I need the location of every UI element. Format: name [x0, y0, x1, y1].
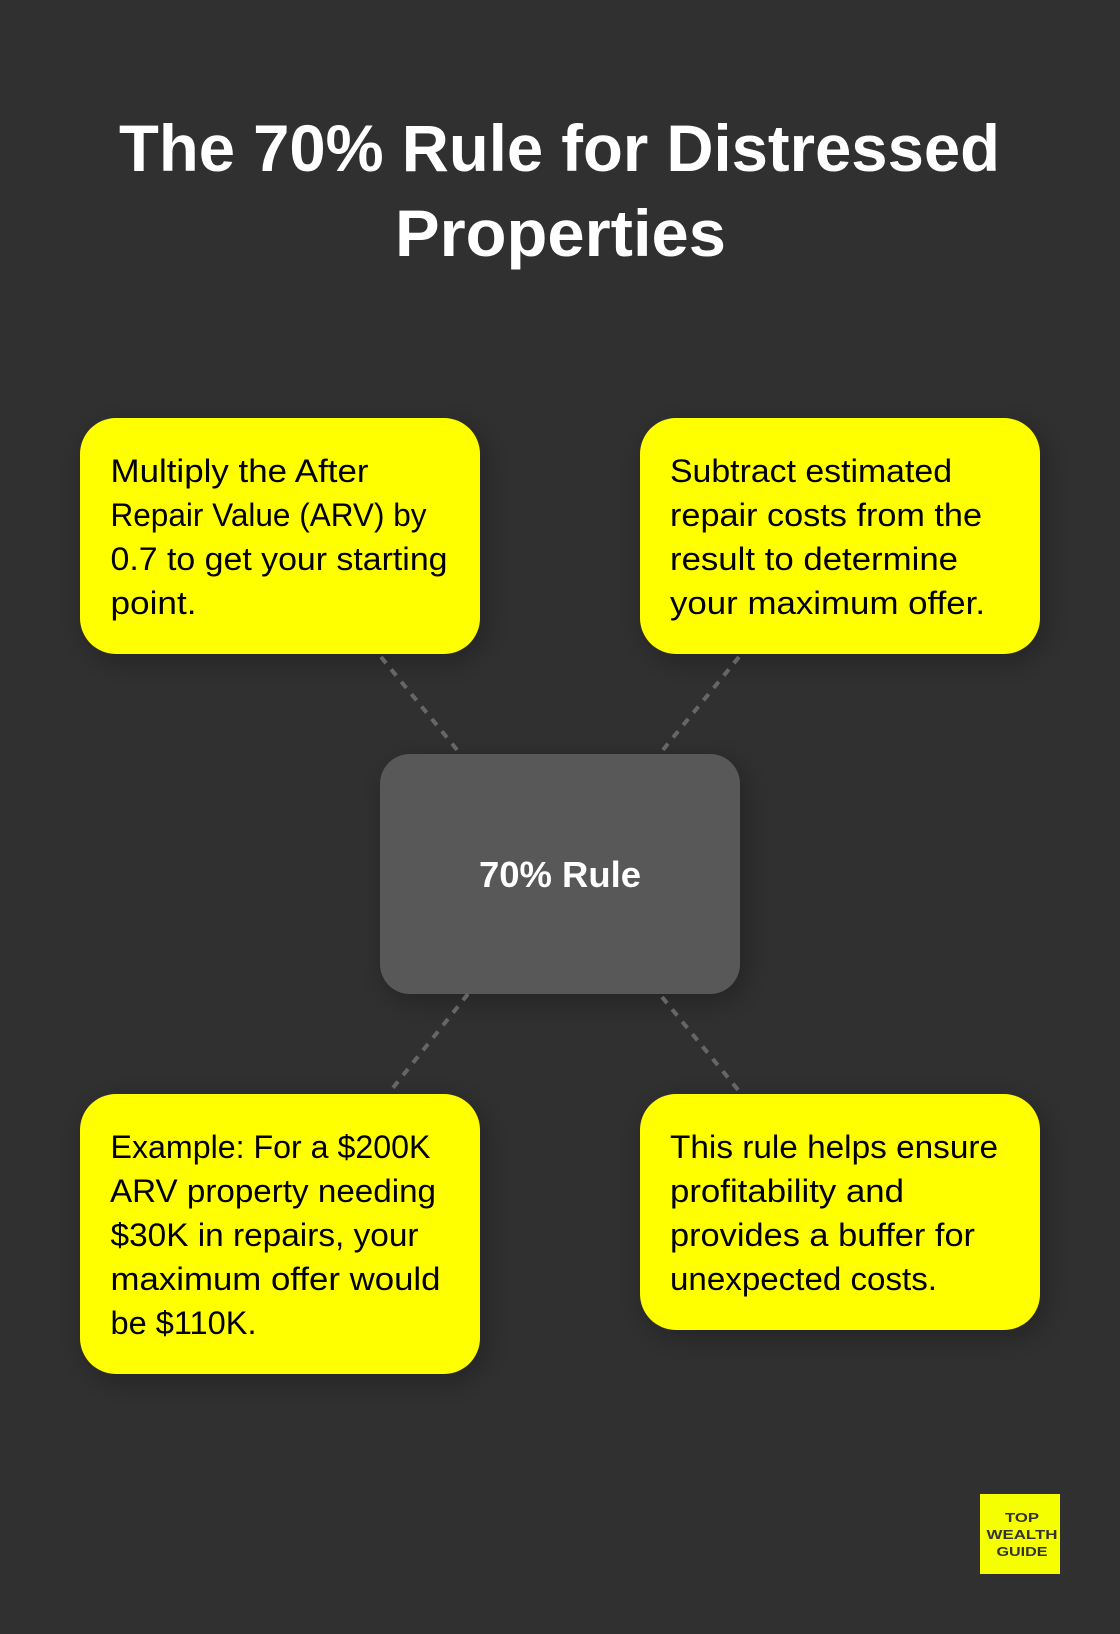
card text: profitability and	[670, 1173, 904, 1209]
card text	[110, 453, 448, 621]
card text: 0.7 to get your starting	[110, 541, 448, 577]
card text: ARV property needing	[110, 1173, 436, 1209]
panel: step one, multiply ARV	[80, 418, 480, 654]
panel: center 70% rule	[380, 754, 740, 994]
title: Properties	[395, 196, 726, 270]
card text: result to determine	[670, 541, 958, 577]
logo: Top Wealth Guide: GUIDE	[996, 1544, 1048, 1559]
connector: bottom-right card to center	[662, 997, 739, 1091]
panel: step two, subtract repairs	[640, 418, 1040, 654]
logo: Top Wealth Guide	[980, 1494, 1060, 1574]
panel: why the rule helps	[640, 1094, 1040, 1330]
card text: This rule helps ensure	[670, 1129, 998, 1165]
card text: provides a buffer for	[670, 1217, 975, 1253]
card text: Subtract estimated	[670, 453, 952, 489]
card text: unexpected costs.	[670, 1261, 937, 1297]
card text	[670, 1129, 998, 1297]
connector: top-right card to center	[662, 657, 739, 751]
card text: Example: For a $200K	[110, 1129, 430, 1165]
connector: bottom-left card to center	[388, 994, 468, 1094]
card text: Multiply the After	[110, 453, 369, 489]
logo: Top Wealth Guide: WEALTH	[986, 1527, 1058, 1542]
card text: $30K in repairs, your	[110, 1217, 419, 1253]
panel: worked example	[80, 1094, 480, 1374]
card text: your maximum offer.	[670, 585, 985, 621]
center label: 70% Rule	[479, 854, 641, 895]
connector: top-left card to center	[381, 657, 458, 751]
card text: repair costs from the	[670, 497, 982, 533]
card text: be $110K.	[110, 1305, 256, 1341]
card text: maximum offer would	[110, 1261, 440, 1297]
card text: point.	[110, 585, 196, 621]
logo: Top Wealth Guide: TOP	[1005, 1510, 1039, 1525]
title: The 70% Rule for Distressed	[119, 111, 1000, 185]
card text	[110, 1129, 440, 1341]
card text: Repair Value (ARV) by	[110, 497, 426, 533]
card text	[670, 453, 985, 621]
title	[119, 111, 1000, 270]
